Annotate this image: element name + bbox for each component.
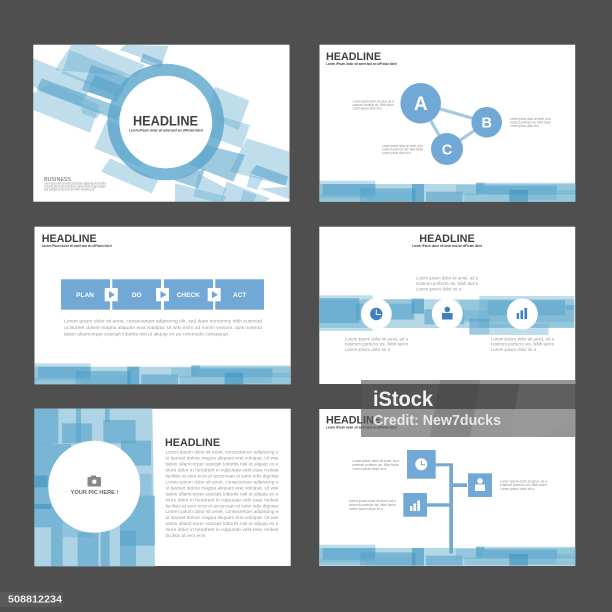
text for C: Lorem ipsum dolor sit amet, ad a <box>382 144 423 148</box>
text for clock: nostrum porfecto vis. Nibh tacim <box>352 463 399 467</box>
act step: ACT <box>233 292 246 299</box>
slide headline: HEADLINE <box>419 233 475 245</box>
body paragraph: iriure dolor in hendrerit in vulputate velit esse molest <box>166 497 279 502</box>
body paragraph: tation ullamcorper suscipit lobortis nisl ut aliquip ex e <box>166 491 279 496</box>
node B <box>471 107 502 138</box>
lower left text: Lorem ipsum dolor sit amet, ad a <box>345 336 408 341</box>
clock icon <box>361 298 392 330</box>
bar chart box <box>403 493 427 517</box>
icon: camera <box>88 476 101 486</box>
body paragraph: facilisis at vero eros et accumsan et iusto odio dignissi <box>166 474 278 478</box>
act step <box>215 279 264 310</box>
business text block: erat volutpat ut wisi enim ad minim veniam quis <box>44 188 94 192</box>
lower right text <box>491 336 554 352</box>
do step <box>112 279 161 310</box>
body paragraph: facilisis at vero eros et accumsan et iusto odio dignissi <box>166 503 278 508</box>
text for clock: Lorem ipsum dolor sit a <box>352 467 386 471</box>
person icon <box>432 298 463 330</box>
text for person <box>500 479 547 491</box>
network connectors <box>421 103 487 149</box>
picture mosaic <box>34 409 155 566</box>
text for clock <box>352 459 399 471</box>
slide subtitle: Lorem iPsum dolor sit amet and an ofFician liderI <box>412 244 482 248</box>
slide headline: HEADLINE <box>42 233 97 245</box>
lower right text: Lorem ipsum dolor sit a <box>491 347 536 352</box>
image id tag <box>0 592 63 607</box>
panel: three icons slide <box>319 227 575 384</box>
body paragraph: ut laoreet dolore magna aliquam erat volutpat. Ut wisi <box>166 456 278 460</box>
top text: Lorem ipsum dolor sit a <box>416 286 461 291</box>
bar chart icon <box>507 298 538 330</box>
bottom band <box>319 545 575 566</box>
image id tag: 508812234 <box>8 593 62 605</box>
top text <box>416 276 478 291</box>
business text block: BUSINESS <box>44 177 71 183</box>
text for person: nostrum porfecto vis. Nibh tacim <box>500 483 547 487</box>
PDCA paragraph: ut laoreet dolore magna aliquam erat volutpat. Ut wisi enim ad minim veniam, quis nostrud <box>64 325 262 330</box>
play arrow 3 <box>208 288 221 301</box>
text for bar chart: nostrum porfecto vis. Nibh tacim <box>349 503 396 507</box>
text for C <box>382 144 423 155</box>
text for A: nostrum porfecto vis. Nibh tacim <box>353 103 394 107</box>
body paragraph: Lorem ipsum dolor sit amet, consectetuer adipiscing e <box>166 509 279 514</box>
bottom band <box>319 181 575 202</box>
body paragraph: iriure dolor in hendrerit in vulputate velit esse molest <box>166 527 279 532</box>
node C <box>431 133 463 165</box>
plan step <box>61 279 110 310</box>
PDCA paragraph: tation ullamcorper suscipit lobortis nisl ut aliquip ex ea commodo consequat <box>64 332 229 336</box>
text for bar chart <box>349 499 396 511</box>
slide subtitle: Lorem iPsum dolor sit amet and an ofFician liderI <box>326 62 397 66</box>
body paragraph <box>166 450 279 538</box>
panel: cover slide <box>33 45 290 203</box>
text for person: Lorem ipsum dolor sit amet, ad a <box>500 479 547 483</box>
text for clock: Lorem ipsum dolor sit amet, ad a <box>352 459 399 463</box>
text for bar chart: Lorem ipsum dolor sit amet, ad a <box>349 499 396 503</box>
body paragraph: ut laoreet dolore magna aliquam erat volutpat. Ut wisi <box>166 515 278 520</box>
PDCA paragraph: Lorem ipsum dolor sit amet, consectetuer adipiscing elit, sed diam nonummy nibh euismod <box>64 318 262 324</box>
cover subtitle: Lorem iPsum dolor sit amet and an ofFician liderI <box>129 128 203 132</box>
text for A: Lorem ipsum dolor sit amet, ad a <box>353 100 394 104</box>
clock box <box>407 450 436 479</box>
cover headline: HEADLINE <box>133 114 198 129</box>
node A: A <box>414 94 428 115</box>
body paragraph: iriure dolor in hendrerit in vulputate velit esse molest <box>166 468 279 472</box>
slide subtitle: Lorem iPsum dolor sit amet and an ofFician liderI <box>42 244 112 248</box>
panel: PDCA slide <box>34 227 291 384</box>
watermark <box>361 380 575 437</box>
lower left text <box>345 336 408 352</box>
plan step: PLAN <box>76 292 94 299</box>
text for A: Lorem ipsum dolor sit a <box>353 106 382 110</box>
node B: B <box>481 116 492 132</box>
watermark logo: iStock <box>373 388 433 411</box>
text for B: nostrum porfecto vis. Nibh tacim <box>510 120 551 124</box>
slide headline: HEADLINE <box>165 437 220 449</box>
text for person: Lorem ipsum dolor sit a <box>500 487 534 491</box>
text for A <box>353 100 394 110</box>
PDCA paragraph <box>64 318 262 336</box>
body paragraph: Lorem ipsum dolor sit amet, consectetuer adipiscing e <box>166 450 279 454</box>
tree connectors <box>427 463 467 554</box>
business text block: nonummy nibh euismod tincidunt ut laoreet dolore magna aliquam <box>44 184 106 188</box>
panel: ABC network slide <box>319 45 575 202</box>
panel: picture slide <box>34 409 291 566</box>
play arrow 1 <box>105 288 118 301</box>
text for C: nostrum porfecto vis. Nibh tacim <box>382 148 423 152</box>
node C: C <box>442 142 453 158</box>
body paragraph: tation ullamcorper suscipit lobortis nisl ut aliquip ex e <box>166 462 279 466</box>
body paragraph: ut laoreet dolore magna aliquam erat volutpat. Ut wisi <box>166 485 278 490</box>
check step <box>164 279 213 310</box>
slide subtitle: Lorem iPsum dolor sit amet and an ofFician liderI <box>326 426 397 430</box>
picture caption: YOUR PIC HERE ! <box>71 490 119 496</box>
ring and headline circle <box>113 70 218 174</box>
cover tilted rectangles <box>33 45 289 203</box>
panel: tree diagram slide <box>319 409 575 566</box>
bottom band <box>35 363 291 384</box>
text for C: Lorem ipsum dolor sit a <box>382 151 411 155</box>
business text block <box>44 177 106 192</box>
play arrow 2 <box>156 288 169 301</box>
do step: DO <box>132 292 142 299</box>
watermark credit: Credit: New7ducks <box>373 413 501 429</box>
lower left text: nostrum porfecto vis. Nibh tacim <box>345 342 408 347</box>
lower right text: Lorem ipsum dolor sit amet, ad a <box>491 336 554 341</box>
node A <box>400 83 441 124</box>
lower right text: nostrum porfecto vis. Nibh tacim <box>491 342 554 347</box>
check step: CHECK <box>177 292 200 299</box>
top text: Lorem ipsum dolor sit amet, ad a <box>416 276 478 281</box>
business text block: Lorem ipsum dolor sit amet consectetuer adipiscing elit sed diam <box>44 182 106 186</box>
slide headline: HEADLINE <box>326 414 381 426</box>
top text: nostrum porfecto vis. Nibh tacim <box>416 281 478 286</box>
text for bar chart: Lorem ipsum dolor sit a <box>349 507 383 511</box>
text for B: Lorem ipsum dolor sit a <box>510 124 539 128</box>
text for B <box>510 117 551 128</box>
slide headline: HEADLINE <box>326 51 381 63</box>
body paragraph: facilisis at vero eros <box>166 533 206 538</box>
person box <box>468 473 492 497</box>
middle band <box>319 295 574 335</box>
text for B: Lorem ipsum dolor sit amet, ad a <box>510 117 551 121</box>
picture placeholder circle <box>48 441 140 533</box>
lower left text: Lorem ipsum dolor sit a <box>345 347 390 352</box>
body paragraph: Lorem ipsum dolor sit amet, consectetuer adipiscing e <box>166 479 279 484</box>
body paragraph: tation ullamcorper suscipit lobortis nisl ut aliquip ex e <box>166 521 279 526</box>
